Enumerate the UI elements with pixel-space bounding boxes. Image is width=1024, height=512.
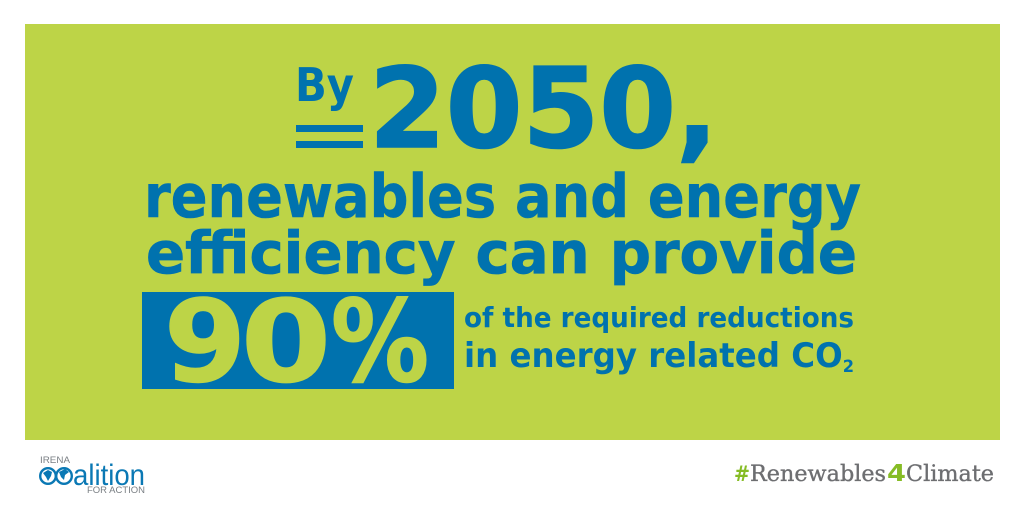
text: 90%: % [331, 276, 429, 408]
text: in energy related CO2: 2 [843, 357, 854, 377]
panel: green background [25, 24, 1000, 440]
icon: double underline [296, 125, 363, 148]
heading: By 2050 [295, 45, 718, 174]
logo: IRENA Coalition for Action [40, 455, 145, 495]
text: efficiency can provide: efficiency can provide [146, 219, 857, 287]
text: 2050,: 2050, [369, 45, 718, 174]
text: 4: 4 [887, 461, 906, 487]
text: 90%: 0 [241, 276, 331, 408]
text: Renewables: Renewables [750, 462, 886, 487]
text: By: By [295, 58, 354, 112]
text: Climate: Climate [906, 462, 994, 487]
icon: globe letters [40, 468, 72, 484]
text: of the required reductions: of the required reductions [464, 301, 854, 334]
text: hash: # [734, 462, 750, 486]
text: alition: alition [73, 459, 145, 492]
text: 90% [164, 276, 429, 408]
text: hashtag Renewables4Climate [734, 461, 994, 487]
text: 90%: 9 [164, 276, 246, 408]
callout: 90% box [142, 276, 454, 408]
text: in energy related CO2: in energy related CO [464, 336, 861, 376]
text: IRENA: IRENA [40, 455, 71, 466]
text: renewables and energy: renewables and energy [144, 162, 861, 232]
text: FOR ACTION: FOR ACTION [87, 485, 145, 495]
